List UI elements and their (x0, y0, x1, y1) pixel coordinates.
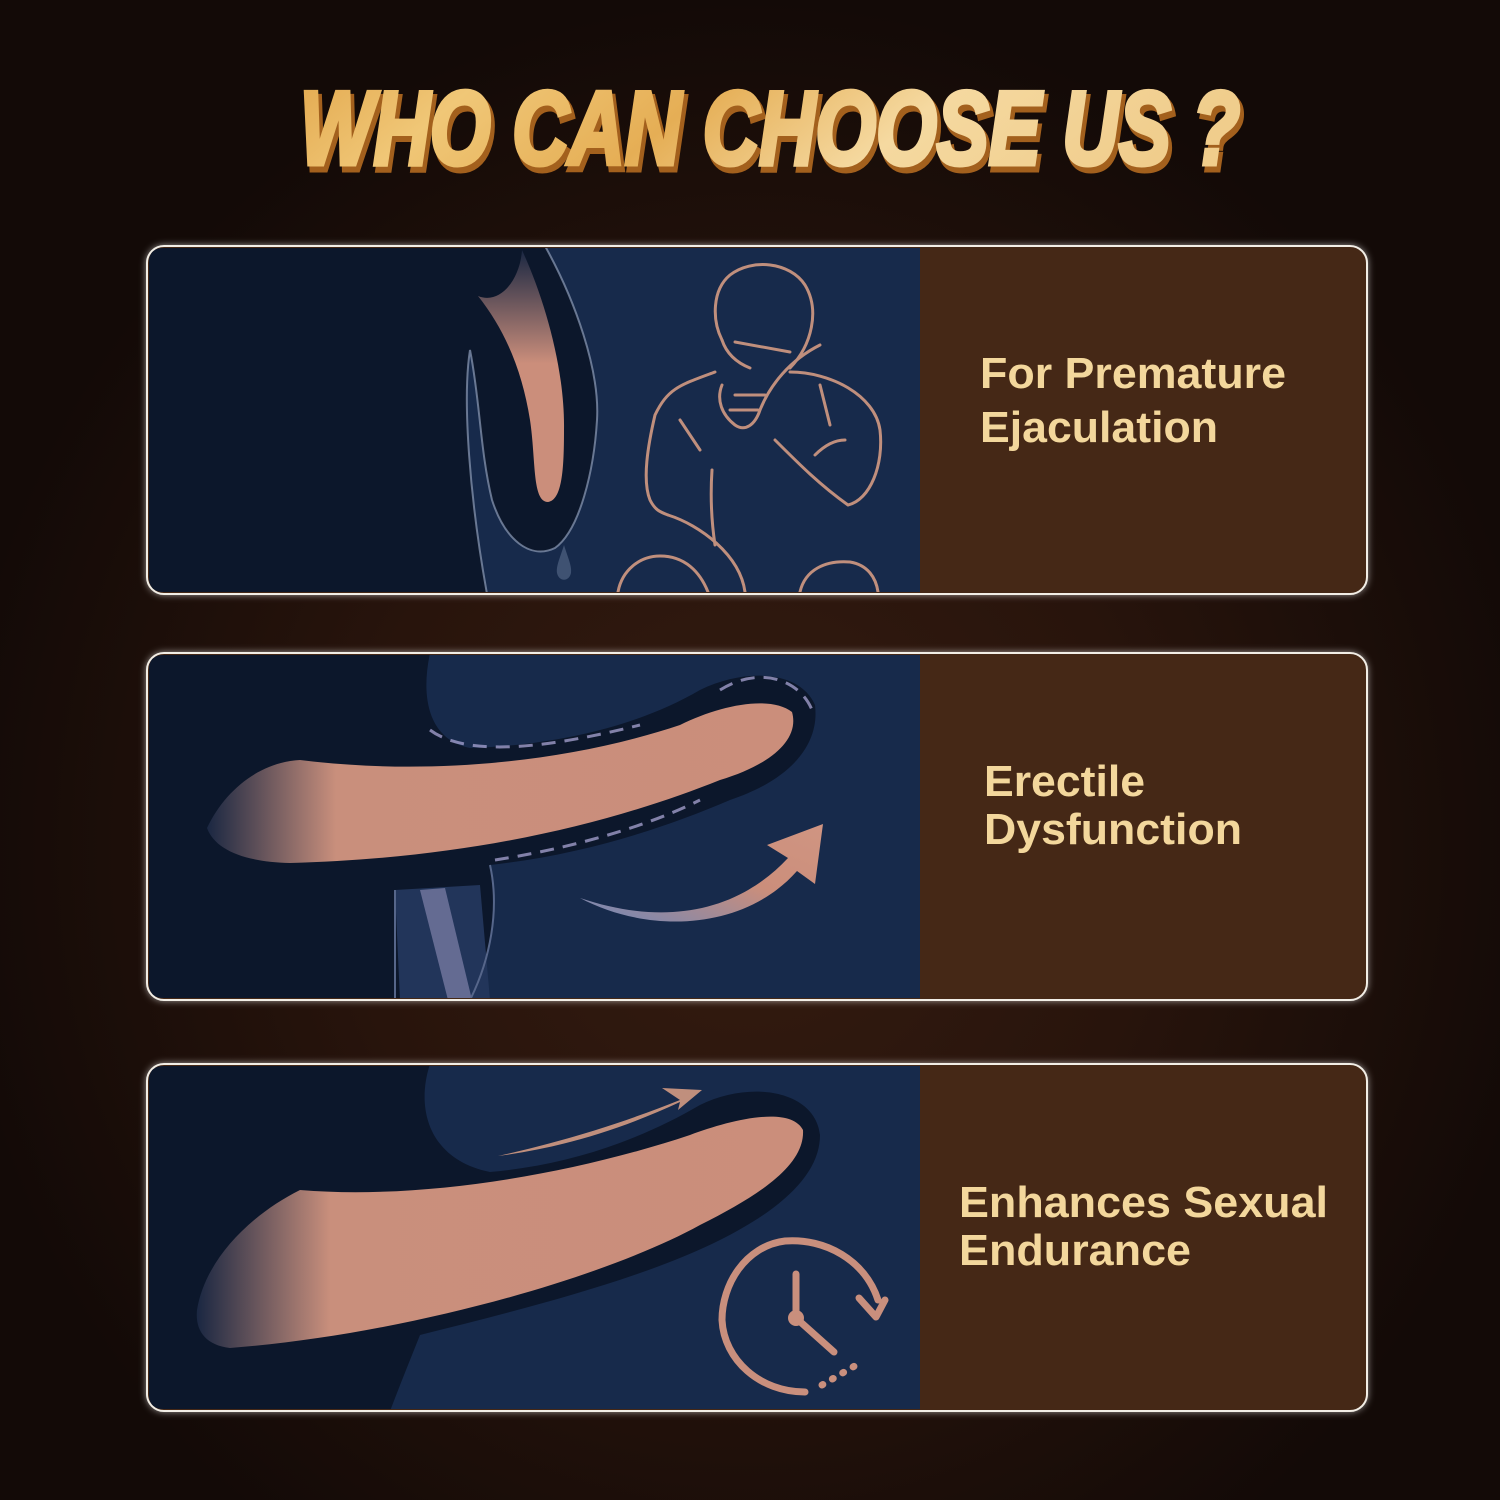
sparks (430, 677, 812, 860)
text: sexual endurance (959, 1178, 1328, 1275)
dark body silhouette (147, 1064, 820, 1411)
text: sexual endurance: Endurance (959, 1226, 1191, 1275)
icon: forward arrow (498, 1088, 702, 1156)
text: erectile dysfunction: Dysfunction (984, 805, 1242, 854)
illustration: extended shape (197, 1117, 803, 1348)
text: premature ejaculation: Ejaculation (980, 403, 1218, 452)
icon: rising arrow (580, 824, 823, 922)
text: sexual endurance: Enhances Sexual (959, 1178, 1328, 1227)
text: premature ejaculation: For Premature (980, 349, 1286, 398)
text: premature ejaculation (980, 349, 1286, 452)
panel: premature ejaculation (147, 246, 1367, 594)
contour lines (467, 246, 597, 594)
dark body silhouette (147, 246, 597, 594)
panel: sexual endurance (147, 1064, 1367, 1411)
dark body silhouette (147, 653, 816, 1000)
text: erectile dysfunction: Erectile (984, 757, 1145, 806)
icon: drop (557, 545, 571, 580)
illustration: extended shape (207, 703, 793, 863)
panel: erectile dysfunction (147, 653, 1367, 1000)
illustration: drooping shape (478, 250, 564, 502)
icon: worried man outline (618, 265, 881, 592)
icon: clock (722, 1241, 885, 1392)
text: erectile dysfunction (984, 757, 1242, 854)
band (395, 885, 490, 1000)
